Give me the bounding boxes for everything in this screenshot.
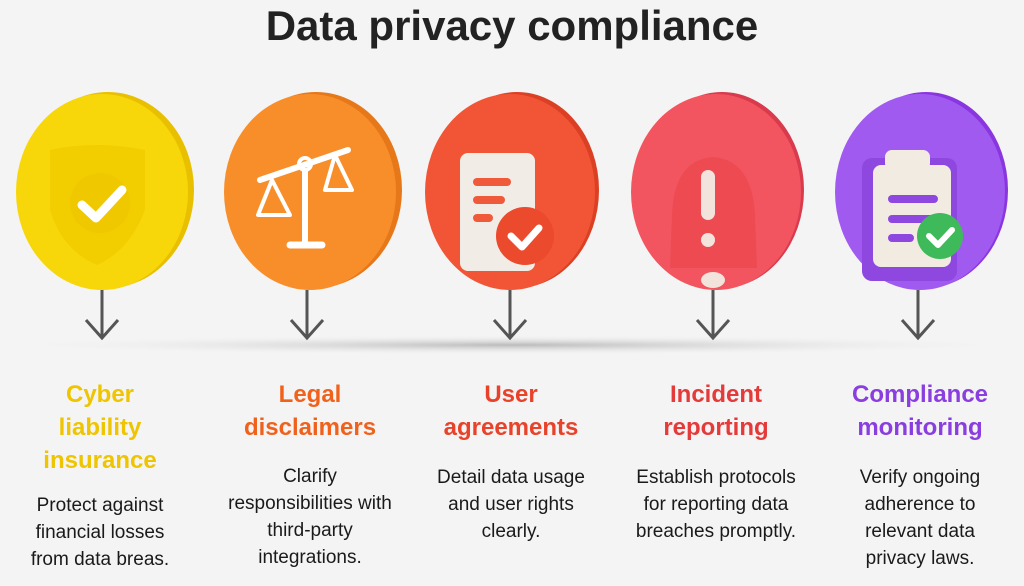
icon: red bell — [631, 92, 804, 338]
heading: disclaimers — [244, 414, 376, 441]
column: user agreements: clearly. — [482, 521, 540, 542]
heading: reporting — [663, 414, 769, 441]
column: incident reporting: Establish protocols — [636, 467, 796, 488]
heading: monitoring — [857, 414, 983, 441]
column: compliance monitoring: adherence to — [865, 494, 975, 515]
column: user agreements: Detail data usage — [437, 467, 585, 488]
heading: insurance — [43, 447, 157, 474]
column: cyber liability insurance — [31, 381, 169, 570]
icon: yellow shield — [16, 92, 194, 338]
column: user agreements — [437, 381, 585, 542]
heading — [244, 381, 376, 441]
heading: Compliance — [852, 381, 988, 408]
column: incident reporting: breaches promptly. — [636, 521, 796, 542]
heading — [444, 381, 578, 441]
heading: agreements — [444, 414, 578, 441]
column: legal disclaimers: Clarify — [283, 466, 337, 487]
heading: User — [484, 381, 538, 408]
column: compliance monitoring — [852, 381, 988, 569]
icon: purple clipboard — [835, 92, 1008, 338]
column: cyber liability insurance: Protect against — [37, 495, 163, 516]
column: cyber liability insurance: from data breas. — [31, 549, 169, 570]
column: user agreements: and user rights — [448, 494, 574, 515]
icon: orange scales — [224, 92, 402, 338]
column: legal disclaimers: responsibilities with — [228, 493, 392, 514]
column: legal disclaimers: integrations. — [258, 547, 362, 568]
icons row — [16, 92, 1008, 351]
heading — [852, 381, 988, 441]
heading: Incident — [670, 381, 762, 408]
heading: Cyber — [66, 381, 134, 408]
column: legal disclaimers: third-party — [267, 520, 353, 541]
column: compliance monitoring: Verify ongoing — [860, 467, 980, 488]
heading: liability — [59, 414, 141, 441]
column: legal disclaimers — [228, 381, 392, 568]
column: compliance monitoring: relevant data — [865, 521, 975, 542]
icon: red-orange document — [425, 92, 599, 338]
column: cyber liability insurance: financial losses — [36, 522, 164, 543]
heading — [663, 381, 769, 441]
column: compliance monitoring: privacy laws. — [866, 548, 974, 569]
heading — [43, 381, 157, 474]
column: incident reporting: for reporting data — [644, 494, 788, 515]
column: incident reporting — [636, 381, 796, 542]
heading: Legal — [279, 381, 341, 408]
title: Data privacy compliance — [266, 2, 758, 49]
